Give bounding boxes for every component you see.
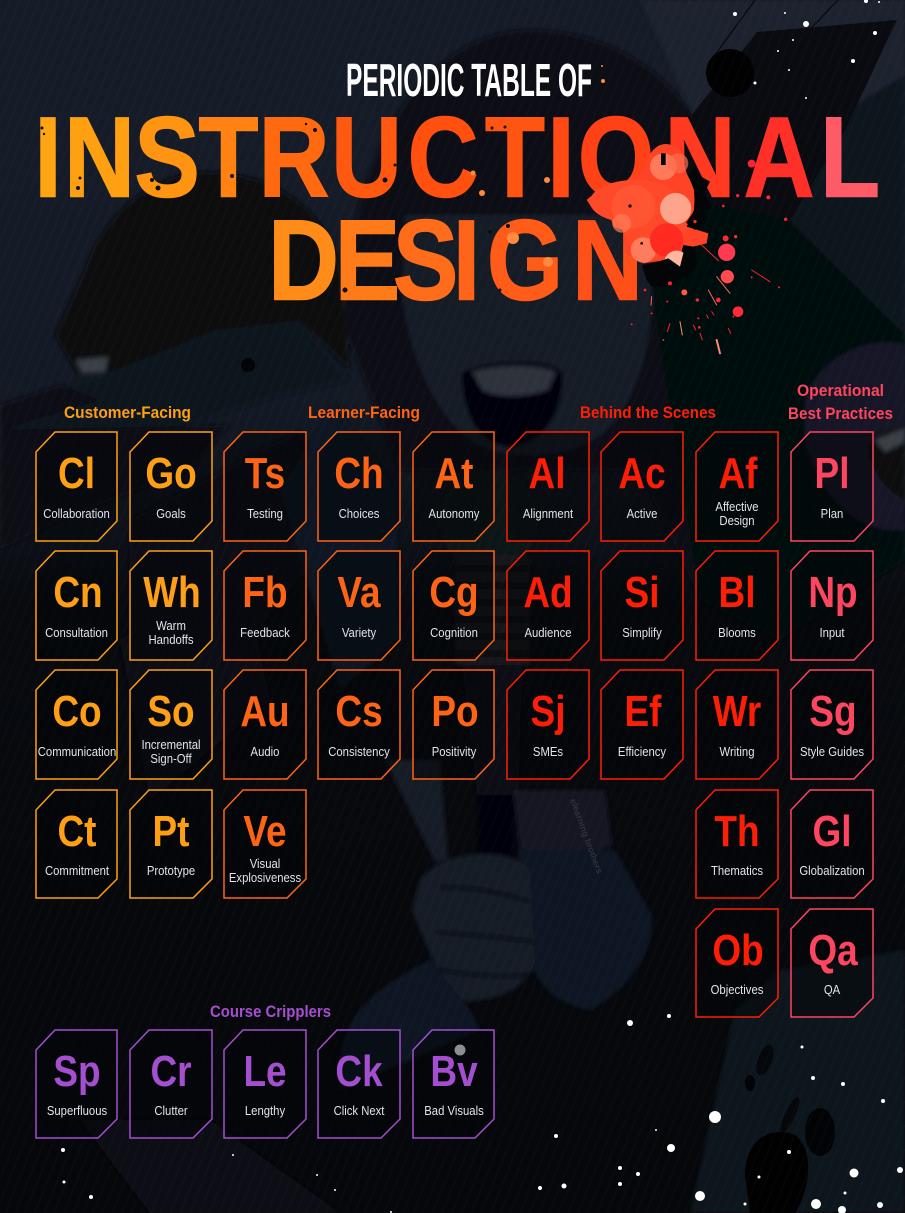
element: Qa QA bbox=[791, 909, 873, 1017]
element: Sg Style Guides: Sg bbox=[809, 686, 857, 736]
element: So Incremental Sign-Off: Incremental bbox=[141, 737, 201, 752]
element: Ts Testing: Ts bbox=[245, 448, 285, 498]
element: Fb Feedback: Fb bbox=[242, 567, 288, 617]
element: Bv Bad Visuals: Bv bbox=[430, 1046, 478, 1096]
element: Af Affective Design: Af bbox=[719, 448, 758, 498]
element: Ac Active bbox=[601, 432, 683, 541]
element: Wh Warm Handoffs: Warm bbox=[156, 618, 186, 633]
element: Au Audio: Audio bbox=[251, 744, 280, 759]
element: Al Alignment: Al bbox=[529, 448, 565, 498]
element: Cg Cognition: Cognition bbox=[430, 625, 478, 640]
element: Sj SMEs: Sj bbox=[531, 686, 565, 736]
element: Sg Style Guides: Style Guides bbox=[800, 744, 864, 759]
element: Qa QA: QA bbox=[824, 982, 841, 997]
element: Ck Click Next: Ck bbox=[335, 1046, 383, 1096]
element: Qa QA: Qa bbox=[808, 925, 858, 975]
heading: Learner-Facing: Learner-Facing bbox=[308, 404, 420, 422]
element: Af Affective Design bbox=[696, 432, 778, 541]
element: Ch Choices: Ch bbox=[334, 448, 384, 498]
element: Np Input: Input bbox=[819, 625, 845, 640]
element: Go Goals: Go bbox=[145, 448, 197, 498]
element: Ob Objectives bbox=[696, 909, 778, 1017]
element: Af Affective Design: Affective bbox=[715, 499, 759, 514]
element: Cr Clutter: Clutter bbox=[154, 1103, 188, 1118]
element: Gl Globalization: Gl bbox=[812, 806, 852, 856]
element: Fb Feedback: Feedback bbox=[240, 625, 291, 640]
element: So Incremental Sign-Off: Sign-Off bbox=[150, 751, 192, 766]
heading: Course Cripplers: Course Cripplers bbox=[210, 1003, 331, 1021]
element: Va Variety bbox=[318, 551, 400, 660]
element: Bl Blooms: Blooms bbox=[718, 625, 756, 640]
element: Ad Audience: Ad bbox=[523, 567, 573, 617]
title: instructional: INSTRUCTIONAL bbox=[34, 94, 880, 221]
element: Ef Efficiency bbox=[601, 670, 683, 779]
element: Cl Collaboration bbox=[36, 432, 117, 541]
element: Ad Audience: Audience bbox=[524, 625, 572, 640]
element: At Autonomy bbox=[413, 432, 494, 541]
element: Ve Visual Explosiveness bbox=[224, 790, 306, 898]
wristband logo text: elearning brothers bbox=[568, 797, 605, 875]
element: Ct Commitment bbox=[36, 790, 117, 898]
element: Fb Feedback bbox=[224, 551, 306, 660]
element: So Incremental Sign-Off bbox=[130, 670, 212, 779]
element: Go Goals: Goals bbox=[156, 506, 186, 521]
element: Ve Visual Explosiveness: Ve bbox=[243, 806, 287, 856]
element: Np Input: Np bbox=[808, 567, 858, 617]
element: Co Communication bbox=[36, 670, 117, 779]
element: Cl Collaboration: Collaboration bbox=[43, 506, 110, 521]
element: Th Thematics bbox=[696, 790, 778, 898]
element: Ef Efficiency: Efficiency bbox=[618, 744, 667, 759]
element: Si Simplify bbox=[601, 551, 683, 660]
element: Wh Warm Handoffs: Wh bbox=[143, 567, 201, 617]
element: Ct Commitment: Ct bbox=[58, 806, 97, 856]
element: Cl Collaboration: Cl bbox=[58, 448, 95, 498]
element: Cn Consultation: Consultation bbox=[45, 625, 108, 640]
element: Cs Consistency bbox=[318, 670, 400, 779]
element: Va Variety: Va bbox=[337, 567, 381, 617]
element: Sp Superfluous: Sp bbox=[53, 1046, 101, 1096]
heading: Behind the Scenes: Behind the Scenes bbox=[580, 404, 716, 422]
element: Ts Testing bbox=[224, 432, 306, 541]
element: Ct Commitment: Commitment bbox=[45, 863, 110, 878]
element: Gl Globalization bbox=[791, 790, 873, 898]
element: Sj SMEs: SMEs bbox=[533, 744, 563, 759]
element: Th Thematics: Thematics bbox=[711, 863, 763, 878]
element: Wr Writing bbox=[696, 670, 778, 779]
element: Af Affective Design: Design bbox=[719, 513, 755, 528]
element: Au Audio bbox=[224, 670, 306, 779]
element: Wh Warm Handoffs: Handoffs bbox=[148, 632, 194, 647]
element: Sg Style Guides bbox=[791, 670, 873, 779]
element: Wh Warm Handoffs bbox=[130, 551, 212, 660]
title: design: DESIGN bbox=[268, 197, 643, 324]
ink grit on title bbox=[40, 123, 510, 292]
element: Cr Clutter bbox=[130, 1030, 212, 1138]
element: Gl Globalization: Globalization bbox=[799, 863, 865, 878]
element: Au Audio: Au bbox=[240, 686, 290, 736]
element: Ob Objectives: Objectives bbox=[711, 982, 763, 997]
element: Bl Blooms: Bl bbox=[719, 567, 755, 617]
element: Al Alignment bbox=[507, 432, 589, 541]
element: Wr Writing: Wr bbox=[713, 686, 761, 736]
element: At Autonomy: Autonomy bbox=[429, 506, 480, 521]
element: So Incremental Sign-Off: So bbox=[147, 686, 195, 736]
element: Ad Audience bbox=[507, 551, 589, 660]
element: Bv Bad Visuals: Bad Visuals bbox=[424, 1103, 484, 1118]
element: Pl Plan bbox=[791, 432, 873, 541]
element: Go Goals bbox=[130, 432, 212, 541]
element: Si Simplify: Si bbox=[625, 567, 659, 617]
heading: Operational Best Practices: Best Practices bbox=[788, 405, 893, 423]
element: Po Positivity: Po bbox=[431, 686, 479, 736]
element: Ve Visual Explosiveness: Visual bbox=[250, 856, 280, 871]
element: Cn Consultation bbox=[36, 551, 117, 660]
element: Al Alignment: Alignment bbox=[523, 506, 574, 521]
element: Le Lengthy: Lengthy bbox=[245, 1103, 286, 1118]
element: Ve Visual Explosiveness: Explosiveness bbox=[229, 870, 301, 885]
element: Sj SMEs bbox=[507, 670, 589, 779]
element: Cn Consultation: Cn bbox=[53, 567, 103, 617]
element: Sp Superfluous: Superfluous bbox=[47, 1103, 107, 1118]
element: Pt Prototype: Prototype bbox=[147, 863, 195, 878]
element: Po Positivity bbox=[413, 670, 494, 779]
element: Ch Choices bbox=[318, 432, 400, 541]
element: Pt Prototype: Pt bbox=[153, 806, 190, 856]
heading: Customer-Facing: Customer-Facing bbox=[64, 404, 191, 422]
element: Pt Prototype bbox=[130, 790, 212, 898]
element: Si Simplify: Simplify bbox=[622, 625, 663, 640]
element: Ac Active: Active bbox=[627, 506, 658, 521]
element: Ts Testing: Testing bbox=[247, 506, 283, 521]
element: Po Positivity: Positivity bbox=[432, 744, 477, 759]
element: Ef Efficiency: Ef bbox=[625, 686, 662, 736]
element: Co Communication: Communication bbox=[38, 744, 116, 759]
element: Th Thematics: Th bbox=[714, 806, 760, 856]
element: Ob Objectives: Ob bbox=[712, 925, 764, 975]
element: Le Lengthy: Le bbox=[243, 1046, 287, 1096]
element: Cg Cognition: Cg bbox=[429, 567, 479, 617]
element: Ck Click Next: Click Next bbox=[334, 1103, 385, 1118]
element: Bl Blooms bbox=[696, 551, 778, 660]
tiny orange drops near title bbox=[470, 65, 605, 267]
element: Bv Bad Visuals bbox=[413, 1030, 494, 1138]
title: periodic table of: PERIODIC TABLE OF bbox=[346, 54, 592, 106]
element: Cg Cognition bbox=[413, 551, 494, 660]
element: At Autonomy: At bbox=[435, 448, 474, 498]
element: Va Variety: Variety bbox=[342, 625, 377, 640]
element: Ck Click Next bbox=[318, 1030, 400, 1138]
element: Pl Plan: Pl bbox=[815, 448, 849, 498]
element: Le Lengthy bbox=[224, 1030, 306, 1138]
element: Co Communication: Co bbox=[52, 686, 102, 736]
element: Ac Active: Ac bbox=[618, 448, 666, 498]
element: Cs Consistency: Cs bbox=[335, 686, 383, 736]
paint splatter bbox=[587, 144, 787, 353]
element: Wr Writing: Writing bbox=[720, 744, 754, 759]
element: Pl Plan: Plan bbox=[821, 506, 843, 521]
element: Ch Choices: Choices bbox=[339, 506, 379, 521]
element: Cr Clutter: Cr bbox=[150, 1046, 192, 1096]
element: Np Input bbox=[791, 551, 873, 660]
element: Cs Consistency: Consistency bbox=[328, 744, 391, 759]
element: Sp Superfluous bbox=[36, 1030, 117, 1138]
heading: Operational Best Practices: Operational bbox=[797, 382, 884, 400]
